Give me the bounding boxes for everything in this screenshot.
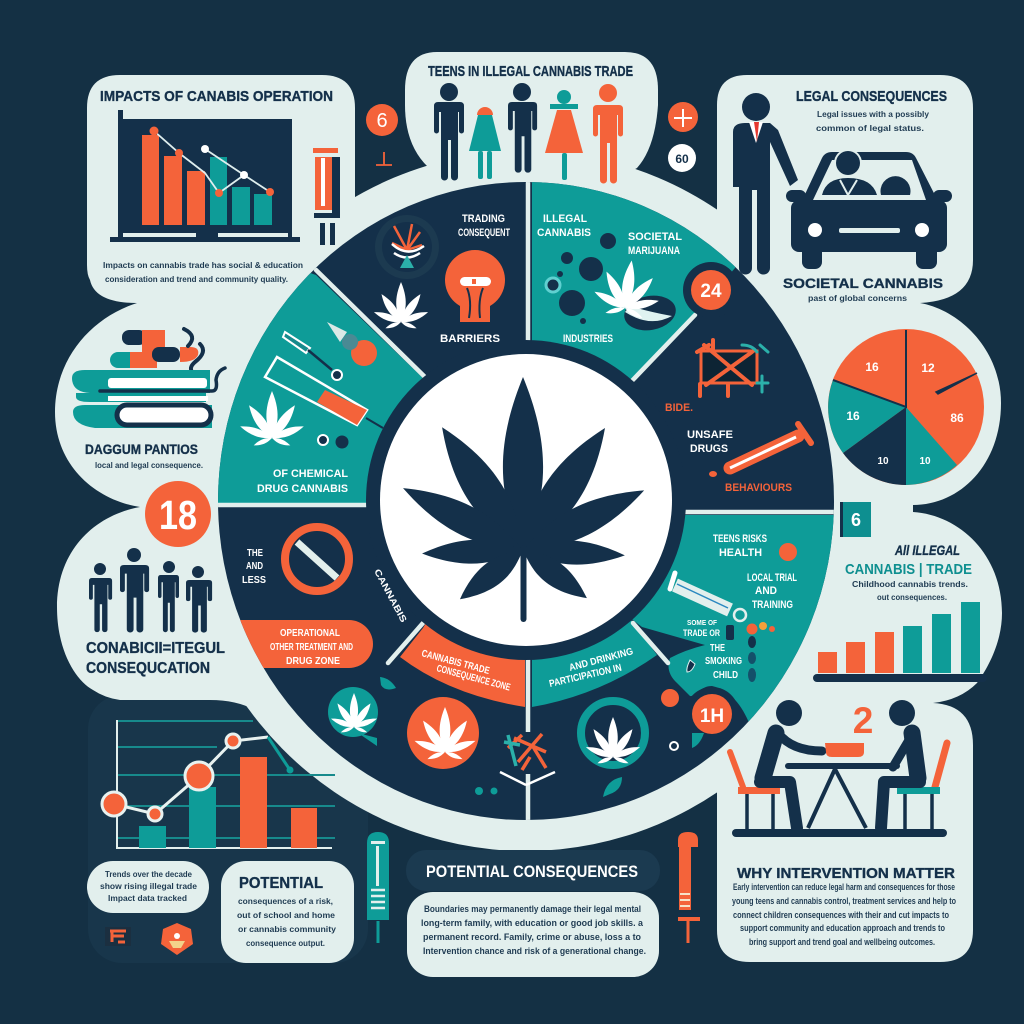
pie chart: 10 [919,456,931,467]
icon: orange leaf circle [407,697,479,769]
sector labels: AND [246,561,263,572]
description: out consequences. [877,592,947,602]
icon: standing man [733,93,798,274]
icon: syringe [265,357,383,428]
sector: right dark [665,340,811,494]
orange label: BEHAVIOURS [725,482,792,494]
description text: connect children consequences with their and cut impacts to [733,910,950,920]
description text: permanent record. Family, crime or abuse, loss a to [423,932,642,942]
pie chart: 10 [877,456,889,467]
badge: 1H [685,687,739,741]
note pill: Impact data tracked [108,893,187,903]
heading [86,640,225,677]
potential box: consequence output. [246,938,325,948]
icon: small tool [283,332,342,380]
sector labels [687,429,733,455]
description: Childhood cannabis trends. [852,579,968,589]
description text: common of legal status. [816,123,924,133]
description text: Boundaries may permanently damage their legal mental [424,904,641,914]
icon: white leaf [373,282,429,330]
sector labels: UNSAFE [687,429,733,441]
sector: lower-right teal [670,533,797,682]
pie chart: 16 [846,409,860,423]
sector labels: SMOKING [705,656,742,667]
potential box: POTENTIAL [239,875,323,892]
badge: square 6: 6 [851,510,861,530]
note pill [87,861,209,913]
heading pill [406,850,660,891]
icon: teal thermometer [367,832,389,943]
small teal drop [380,677,396,689]
panel: pie chart [828,329,984,537]
sector: bottom teal labels: AND DRINKING [568,646,635,674]
sector labels [257,468,348,495]
panel: all illegal cannabis trade [813,542,987,682]
sector: lower-left dark [242,527,555,795]
sector labels: TRADING [462,213,505,225]
icon: crossed frame [697,340,768,396]
note pill: Trends over the decade [105,869,192,879]
caption: local and legal consequence. [95,460,203,470]
sector: top-left dark [373,213,510,345]
people row [434,83,623,184]
rotated ring label: CANNABIS [372,567,409,624]
sector labels [440,213,510,345]
small ring [670,742,678,750]
heading: POTENTIAL CONSEQUENCES [426,862,638,881]
sector labels: LOCAL TRIAL [747,572,797,584]
badge: 6: 6 [376,110,388,132]
description text [103,260,303,284]
heading: CONABICII=ITEGUL [86,640,225,657]
badge: 18: 18 [159,492,197,538]
text box [407,892,659,977]
badge: 18 [145,481,211,547]
badge: 6 [366,104,398,165]
heading: TEENS IN ILLEGAL CANNABIS TRADE [428,63,633,80]
sector labels: SOCIETAL [628,231,682,243]
description text: Impacts on cannabis trade has social & education [103,260,303,270]
icon: four people [89,548,212,633]
bar chart [110,110,300,242]
icon: blade and orange disc [327,322,377,366]
icon: white leaf [239,391,305,448]
sector labels [683,533,797,681]
note pill: show rising illegal trade [100,881,197,891]
badge: 1H: 1H [700,706,724,727]
description text [816,109,929,133]
icon: orange tube [709,424,811,477]
hub white circle [380,354,672,646]
sector labels [537,213,682,345]
orange band label: CONSEQUENCE ZONE [435,663,512,694]
description text: long-term family, with education or good job skills. a [421,918,643,928]
badges: plus and 60 [668,102,698,172]
heading: CANNABIS | TRADE [845,561,972,578]
panel: lower-left line and bar chart [87,720,354,963]
sector labels: THE [247,548,263,559]
orange pill label [270,628,353,667]
orange pill label: DRUG ZONE [286,656,340,667]
dots cluster [546,233,616,324]
heading [845,542,972,578]
description text: Intervention chance and risk of a generational change. [423,946,646,956]
heading: WHY INTERVENTION MATTER [737,865,955,882]
potential box [221,861,354,963]
panel: lower-left dark chart backdrop [88,695,368,963]
icon: vial [313,148,340,245]
dots and blobs [726,622,775,682]
heading: LEGAL CONSEQUENCES [796,88,947,105]
icon: central cannabis leaf [396,377,651,622]
icon: F square [105,927,131,946]
orange band label: CANNABIS TRADE [420,648,491,677]
pie chart: 12 [921,361,935,375]
icon: stacked books and pills [72,329,225,428]
panel: legal consequences [733,88,952,303]
small dark drop [687,660,695,672]
badge: 24 [683,262,739,318]
description text: Legal issues with a possibly [817,109,929,119]
description text: Early intervention can reduce legal harm and consequences for those [733,882,955,892]
potential box: consequences of a risk, [238,896,333,906]
sub heading: SOCIETAL CANNABIS [783,275,943,291]
heading: CONSEQUCATION [86,660,210,677]
sector labels: AND [755,585,777,597]
pie chart: 16 [865,360,879,374]
panel: teens in illegal cannabis trade [428,63,633,184]
dark ring around hub [366,340,686,660]
sector labels: MARIJUANA [628,245,680,257]
pie chart [828,329,984,485]
icon: leaf with swirl [590,256,679,334]
sector labels: OF CHEMICAL [273,468,348,480]
badges: plus and 60: 60 [675,152,689,166]
orange pill label: OPERATIONAL [280,628,340,639]
sector labels: TRAINING [752,599,793,611]
heading: All ILLEGAL [894,542,960,558]
sector: upper-right teal [537,213,739,345]
sector labels: SOME OF [687,620,718,627]
sector: bottom teal labels: PARTICIPATION IN [548,663,623,690]
small teal leaf [603,777,622,797]
heading: IMPACTS OF CANABIS OPERATION [100,88,333,105]
panel: impacts of cannabis operation [100,88,340,284]
sector labels: ILLEGAL [543,213,587,225]
description text: support community and education approach and trends to [740,923,946,933]
sector: lower-right dark icons [581,687,739,797]
panel: why intervention matter [730,700,957,947]
bar chart [813,602,987,682]
small orange dot [779,543,797,561]
description text: bring support and trend goal and wellbeing outcomes. [749,937,935,947]
icon: leaf in teal ring [581,701,645,765]
icon: two people at a table [730,700,947,837]
icon: car with people [786,149,952,269]
small tail [692,733,704,748]
sector labels: BARRIERS [440,333,500,345]
sector labels: HEALTH [719,547,762,559]
small orange label: BIDE. [665,402,693,414]
icon: shield badge [161,923,193,955]
description text [732,882,957,947]
potential box: or cannabis community [238,924,336,934]
sector labels: DRUG CANNABIS [257,483,348,495]
combo chart [102,720,335,848]
sector labels: TEENS RISKS [713,533,767,545]
description text [421,904,646,956]
sector labels: TRADE OR [683,628,720,638]
description text: young teens and cannabis control, treatment services and help to [732,896,957,906]
sector: bottom teal labels [548,646,635,690]
icon: round emblem [375,215,439,279]
sector labels: LESS [242,575,266,586]
icon: sprig at center bottom [500,732,555,785]
description [852,579,968,602]
panel: potential consequences [406,850,660,977]
dots [475,787,498,795]
sector labels: CANNABIS [537,227,591,239]
sector labels: INDUSTRIES [563,333,613,345]
dots [318,435,348,448]
prohibition icon [285,527,349,591]
wheel of sectors [218,182,834,820]
icon: two people at a table: 2 [853,700,873,741]
panel: daggum pantios books [72,329,225,470]
heading: DAGGUM PANTIOS [85,441,198,457]
sector labels: CONSEQUENT [458,227,510,239]
pie chart: 86 [950,411,964,425]
orange pill label: OTHER TREATMENT AND [270,642,353,653]
caption: past of global concerns [808,293,907,303]
sector labels [242,548,266,586]
icon: orange bulb [445,250,505,322]
sector: upper-left teal [239,322,383,495]
icon: white tube [670,573,746,621]
description text: consideration and trend and community quality. [105,274,288,284]
sector labels: DRUGS [690,443,728,455]
icon: teal speech leaf [328,687,378,746]
badge: square 6 [840,502,871,537]
badge: 24: 24 [700,281,722,302]
small orange circle [661,689,679,707]
icon: orange thermometer [678,832,700,943]
sector labels: CHILD [713,670,738,681]
sector labels: THE [710,643,725,654]
panel: consequences people group [86,548,225,677]
potential box: out of school and home [237,910,335,920]
